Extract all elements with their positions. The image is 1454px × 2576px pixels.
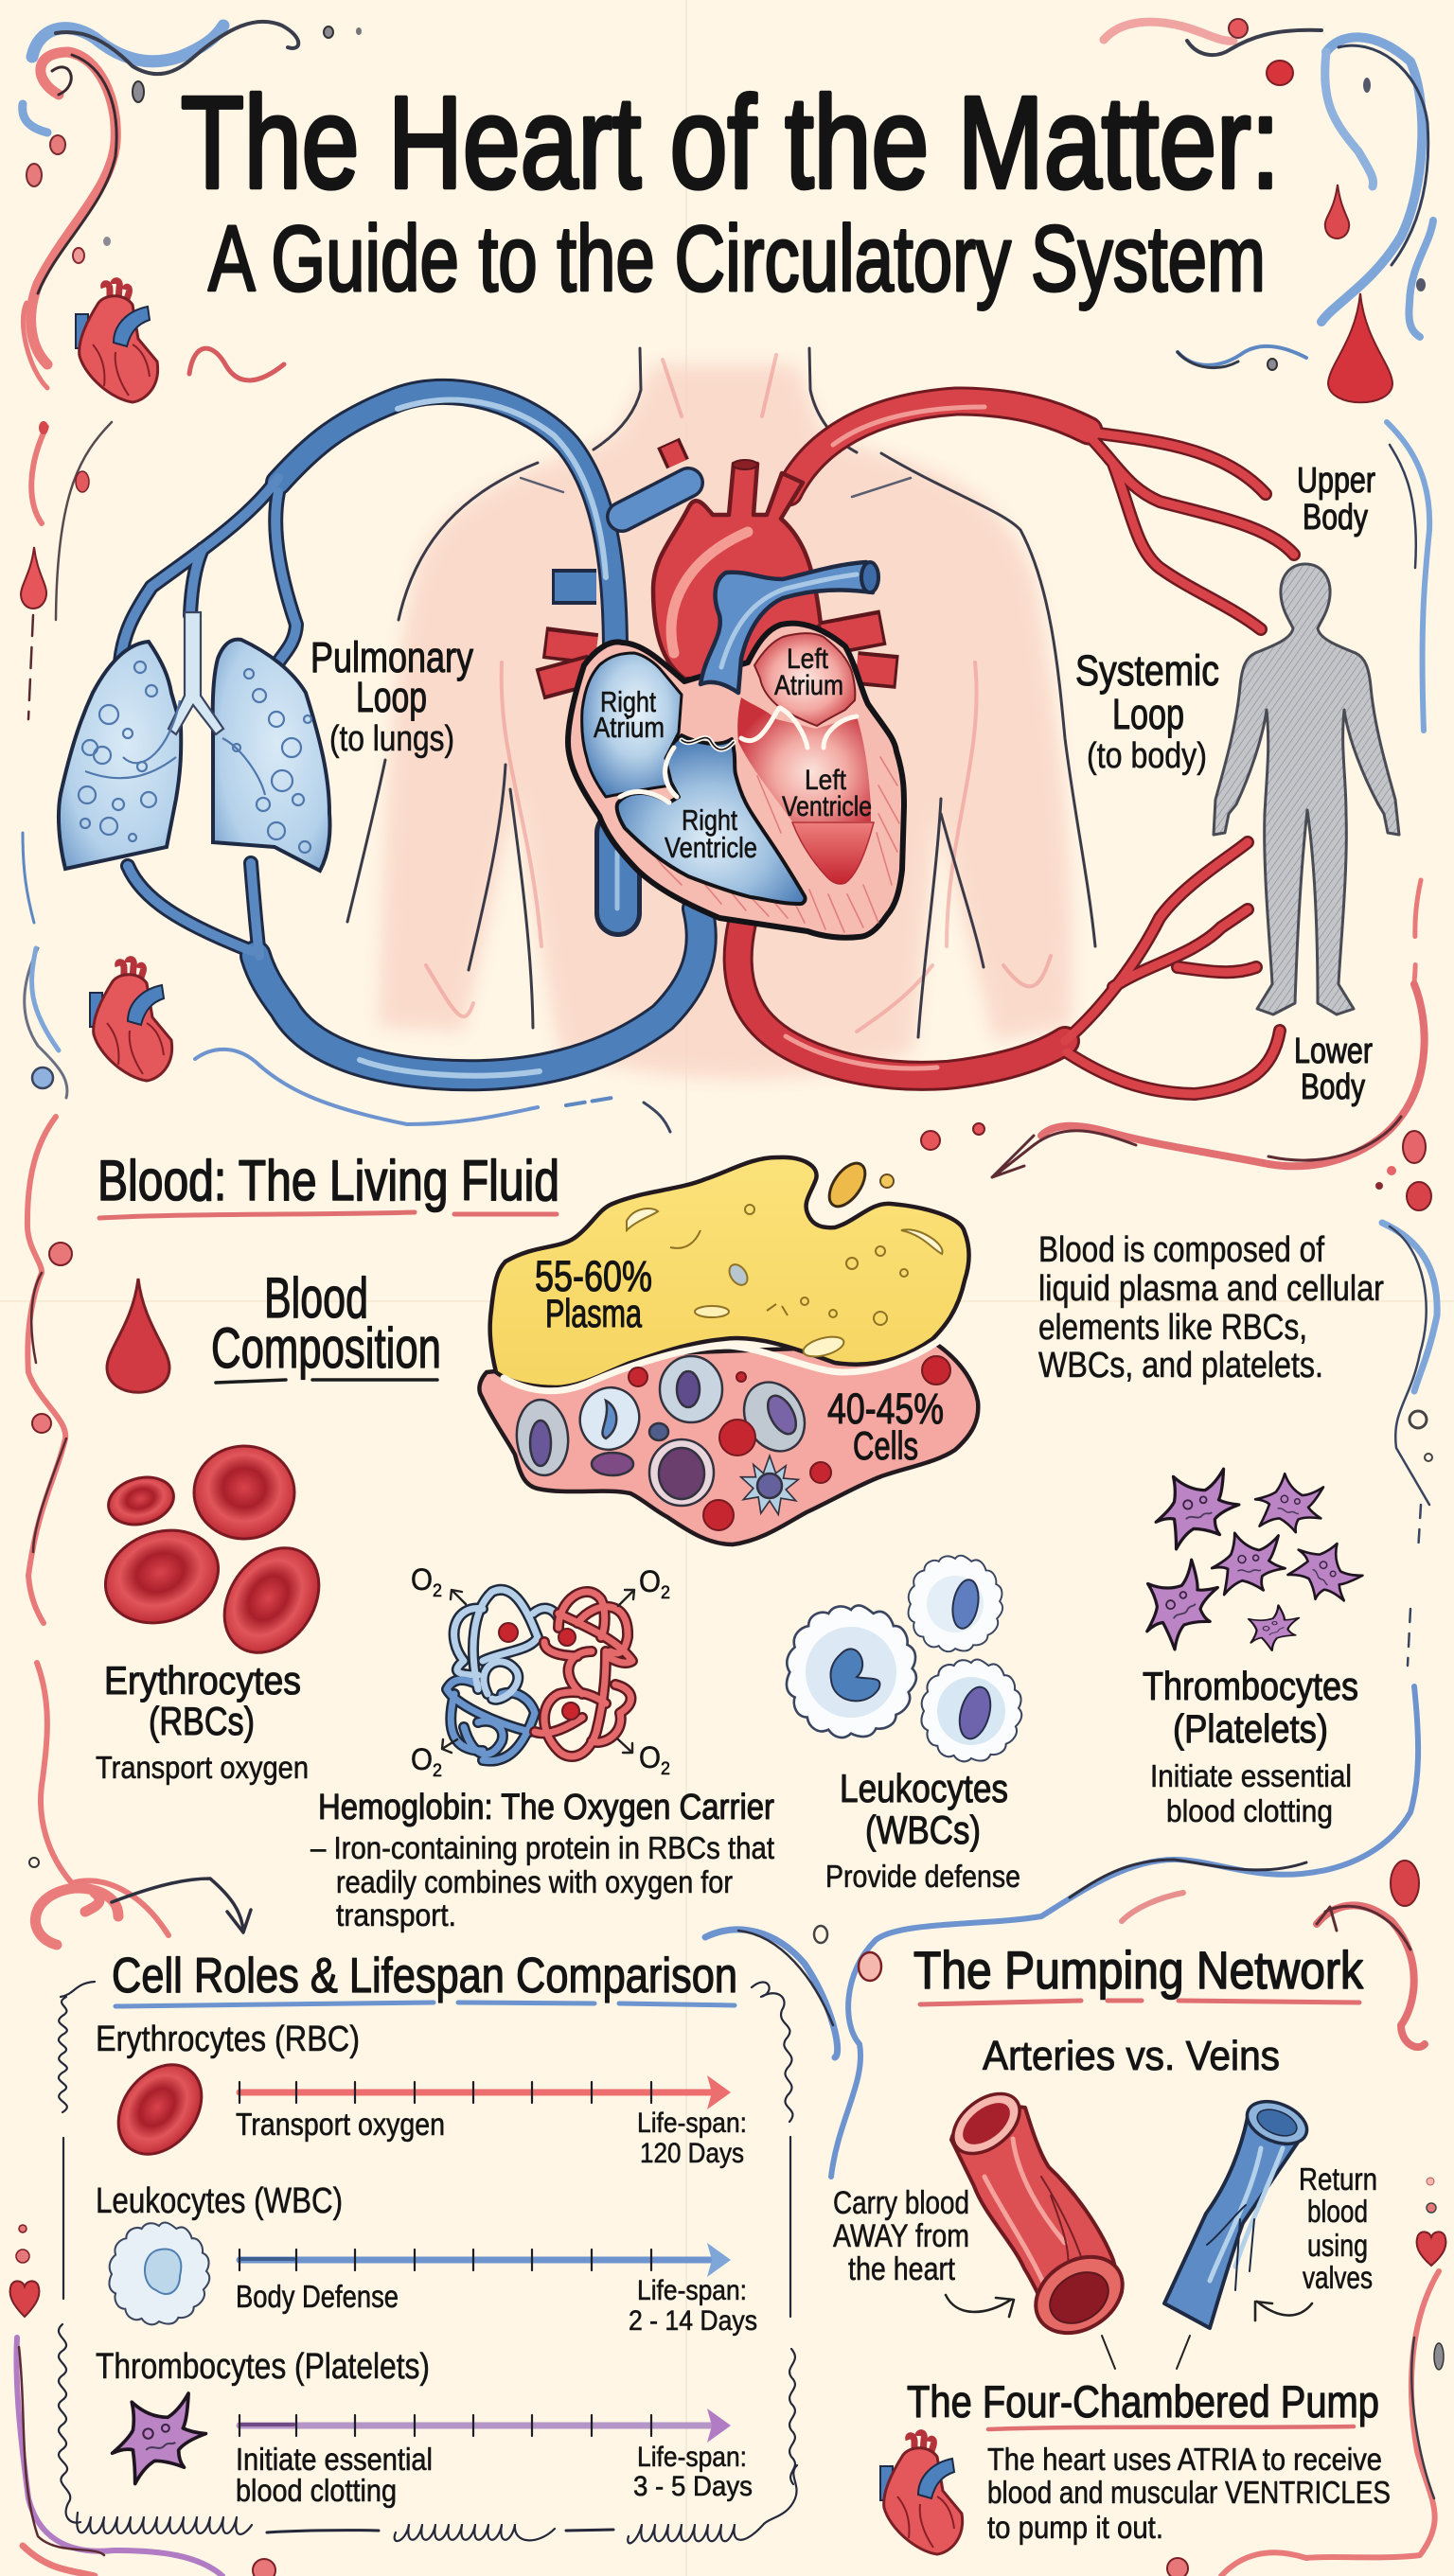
chamber labels: Atrium [774, 670, 843, 701]
icon: platelets [1129, 1461, 1369, 1656]
icon: hemoglobin molecule: 2 [433, 1581, 442, 1601]
label: arteries: Carry blood [833, 2185, 969, 2221]
systemic loop: red vessels [738, 401, 1294, 1094]
cells layer [479, 1344, 978, 1544]
arrow: artery label [946, 2295, 1014, 2317]
label: veins: Return [1299, 2161, 1377, 2197]
left atrium [754, 633, 855, 726]
text block: hemoglobin [310, 1788, 774, 1932]
row: leukocytes [96, 2181, 757, 2337]
text block: four chambers: The heart uses ATRIA to receive [987, 2442, 1382, 2477]
text block: blood description: Blood is composed of [1038, 1230, 1324, 1270]
row: erythrocytes [96, 2020, 747, 2170]
heading: blood the living fluid: Blood: The Living Fluid [98, 1149, 559, 1212]
icon: small heart left [90, 960, 172, 1081]
row: thrombocytes [96, 2347, 753, 2508]
icon: human figure [1214, 564, 1399, 1015]
decorative dots and drops: top corners [27, 19, 1426, 402]
label: systemic loop [1075, 646, 1219, 776]
label: arteries [833, 2185, 969, 2287]
label: upper body: Body [1303, 498, 1368, 538]
chamber labels: Left [805, 765, 847, 796]
label: veins [1299, 2161, 1377, 2295]
label: lower body: Lower [1294, 1032, 1373, 1071]
valves [620, 708, 857, 803]
icon: hemoglobin molecule: O [411, 1742, 433, 1776]
row: erythrocytes: Transport oxygen [236, 2107, 445, 2142]
label: upper body [1297, 461, 1375, 538]
title [181, 70, 1280, 310]
torso background [347, 348, 1095, 1079]
panel frame [59, 1982, 797, 2543]
text block: hemoglobin: Hemoglobin: The Oxygen Carrier [318, 1788, 774, 1827]
text block: hemoglobin: transport. [336, 1897, 456, 1932]
heading: blood composition: Blood [264, 1266, 368, 1330]
row: thrombocytes: 3 - 5 Days [633, 2471, 753, 2502]
chamber labels: Left [787, 644, 829, 675]
label: arteries: the heart [848, 2251, 955, 2287]
icon: hemoglobin molecule: O [639, 1564, 661, 1598]
text block: hemoglobin: readily combines with oxygen for [336, 1864, 733, 1899]
label: upper body: Upper [1297, 461, 1375, 501]
chamber labels: Atrium [594, 711, 665, 744]
chamber labels: Ventricle [782, 791, 872, 822]
label: erythrocytes [96, 1658, 309, 1785]
icon: hemoglobin molecule: O [411, 1562, 433, 1597]
label: systemic loop: Systemic [1075, 646, 1219, 695]
label: leukocytes: Provide defense [825, 1859, 1020, 1894]
label: thrombocytes: (Platelets) [1173, 1706, 1328, 1751]
label: pulmonary loop [310, 633, 473, 759]
row: erythrocytes: Life-span: [637, 2108, 747, 2139]
plasma layer [490, 1157, 969, 1387]
icon: lungs [59, 612, 330, 871]
label: systemic loop: Loop [1112, 690, 1184, 738]
text block: hemoglobin: – Iron-containing protein in RBCs that [310, 1830, 774, 1865]
chamber labels: Right [600, 685, 656, 718]
subheading: arteries vs veins: Arteries vs. Veins [983, 2033, 1280, 2079]
panel: the pumping network [833, 1940, 1391, 2554]
row: leukocytes: Body Defense [236, 2279, 399, 2314]
connector lines [1102, 2336, 1190, 2369]
heading: pumping network: The Pumping Network [913, 1940, 1364, 2000]
pulmonary artery [700, 562, 873, 693]
label: systemic loop: (to body) [1087, 736, 1207, 776]
label: erythrocytes: Transport oxygen [96, 1750, 309, 1785]
label: veins: valves [1303, 2260, 1373, 2295]
right atrium [582, 653, 682, 797]
icon: hemoglobin molecule: 2 [661, 1583, 670, 1603]
label: leukocytes: (WBCs) [865, 1808, 981, 1852]
chamber labels: Right [682, 803, 737, 837]
label: pulmonary loop: (to lungs) [329, 719, 454, 759]
label: pulmonary loop: Loop [356, 673, 427, 721]
icon: hemoglobin molecule: 2 [433, 1761, 442, 1781]
left ventricle [737, 697, 871, 821]
icon: hemoglobin molecule: 2 [661, 1759, 670, 1779]
label: thrombocytes: Initiate essential [1150, 1758, 1352, 1793]
chamber labels [594, 644, 872, 864]
label: leukocytes: Leukocytes [840, 1766, 1008, 1810]
row: thrombocytes: blood clotting [236, 2473, 397, 2508]
icon: red blood cells [93, 1446, 338, 1670]
row: thrombocytes: Thrombocytes (Platelets) [96, 2347, 430, 2387]
label: thrombocytes: Thrombocytes [1143, 1664, 1358, 1708]
label: erythrocytes: (RBCs) [149, 1699, 255, 1743]
decorative border: top left [23, 22, 1433, 388]
white cells [514, 1356, 816, 1514]
icon: hemoglobin molecule: O [639, 1740, 661, 1774]
text block: blood description: liquid plasma and cellular [1038, 1269, 1384, 1309]
label: pulmonary loop: Pulmonary [310, 633, 473, 681]
icon: white blood cells [787, 1556, 1021, 1761]
icon: heart [880, 2433, 963, 2554]
text block: blood description: WBCs, and platelets. [1038, 1346, 1323, 1385]
icon: artery [942, 2082, 1137, 2348]
row: thrombocytes: Initiate essential [236, 2442, 433, 2477]
heart diagram [540, 443, 904, 938]
text block: four chambers [987, 2442, 1391, 2545]
text block: blood description [1038, 1230, 1384, 1385]
icon: blood drop [107, 1279, 169, 1392]
chart: blood composition blob: Cells [853, 1423, 918, 1468]
row: erythrocytes: Erythrocytes (RBC) [96, 2020, 360, 2059]
label: lower body [1294, 1032, 1373, 1107]
right pulmonary stubs [824, 627, 897, 672]
heart wall [568, 624, 904, 938]
arrow: vein label [1255, 2302, 1312, 2320]
chart: blood composition blob: Plasma [545, 1291, 642, 1335]
label: leukocytes [825, 1766, 1020, 1894]
text block: four chambers: to pump it out. [987, 2510, 1163, 2545]
icon: small heart top left [76, 281, 158, 402]
panel: cell roles and lifespan comparison [59, 1949, 797, 2543]
chart: blood composition blob [479, 1157, 978, 1544]
aorta [653, 464, 821, 681]
muscle striations [644, 757, 899, 932]
label: erythrocytes: Erythrocytes [104, 1658, 301, 1703]
chart: blood composition blob: 55-60% [535, 1252, 652, 1300]
vessel stubs and vena cava [540, 443, 688, 913]
text block: four chambers: blood and muscular VENTRICLES [987, 2475, 1391, 2510]
label: thrombocytes [1143, 1664, 1358, 1828]
heading: blood composition: Composition [211, 1316, 441, 1380]
icon: hemoglobin molecule [411, 1562, 670, 1781]
label: arteries: AWAY from [833, 2218, 969, 2254]
icon: vein [1164, 2093, 1313, 2328]
heading: blood composition [211, 1266, 441, 1383]
right ventricle [617, 735, 806, 904]
label: lower body: Body [1301, 1067, 1365, 1107]
row: leukocytes: 2 - 14 Days [629, 2305, 757, 2337]
heading: cell roles: Cell Roles & Lifespan Comparison [112, 1949, 737, 2003]
row: thrombocytes: Life-span: [637, 2442, 747, 2473]
label: thrombocytes: blood clotting [1166, 1793, 1333, 1828]
pulmonary loop: blue vessels [120, 392, 701, 1076]
row: leukocytes: Leukocytes (WBC) [96, 2181, 343, 2221]
heading: four chambered pump: The Four-Chambered Pump [907, 2376, 1379, 2426]
chart: blood composition blob: 40-45% [827, 1385, 944, 1433]
row: leukocytes: Life-span: [637, 2275, 747, 2306]
label: veins: blood [1307, 2194, 1368, 2229]
row: erythrocytes: 120 Days [640, 2138, 744, 2169]
chamber labels: Ventricle [665, 831, 757, 864]
label: veins: using [1307, 2228, 1368, 2263]
text block: blood description: elements like RBCs, [1038, 1308, 1307, 1348]
